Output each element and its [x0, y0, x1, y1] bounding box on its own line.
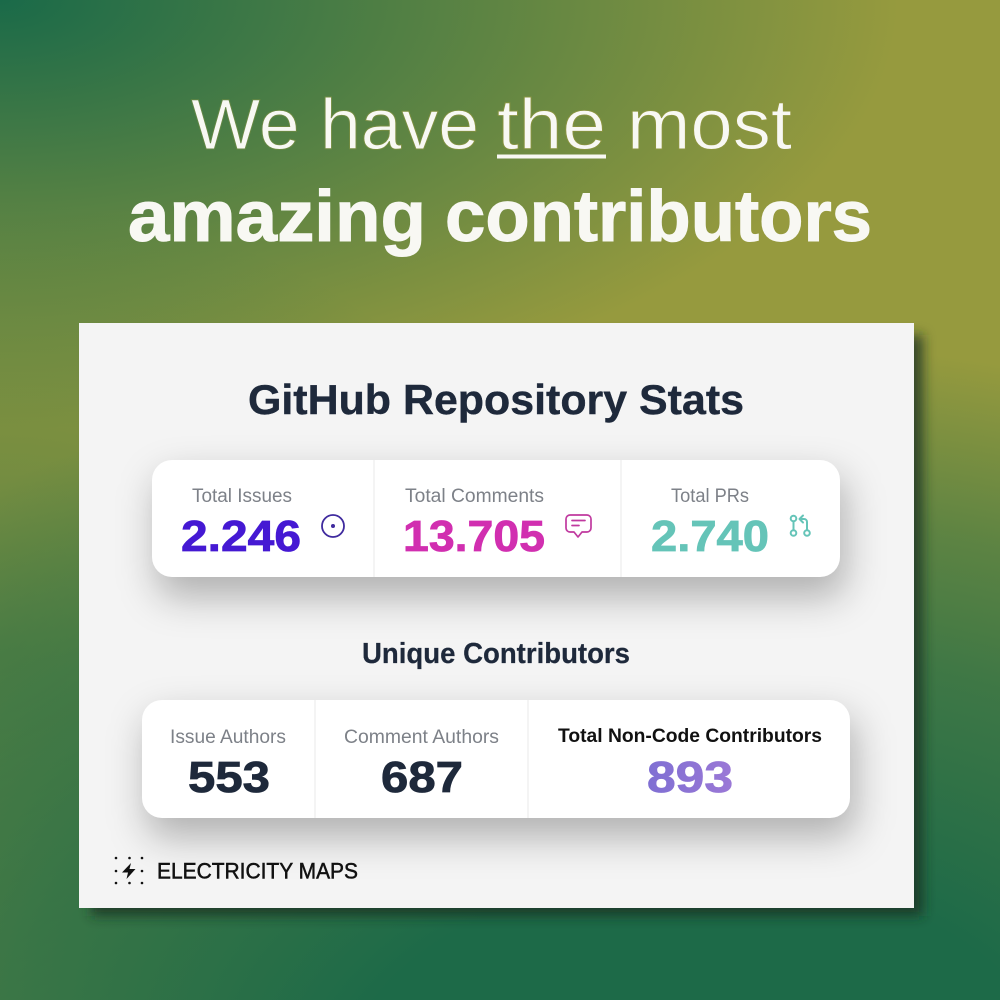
- title line 1: most: [627, 86, 792, 165]
- label: Comment Authors: [344, 727, 499, 748]
- wordmark: ELECTRICITY MAPS: [157, 858, 358, 884]
- card body: [152, 460, 840, 577]
- card dividers: [374, 460, 621, 577]
- value: 893: [647, 753, 733, 802]
- card shadow: [146, 716, 856, 838]
- title line 1: We have: [191, 86, 479, 165]
- icon: bolt in dotted square: [115, 857, 143, 884]
- value: 2.246: [181, 512, 301, 561]
- stat: total PRs: [651, 486, 810, 561]
- stat: issue authors: [170, 727, 286, 802]
- icon: pull request: [791, 516, 810, 536]
- underline: [497, 154, 606, 158]
- logo: Electricity Maps: [115, 857, 358, 884]
- card shadow: [156, 476, 846, 598]
- title line 1: the: [497, 86, 606, 165]
- label: Total PRs: [671, 486, 749, 507]
- subheading: Unique Contributors: [362, 638, 630, 670]
- icon: comment bubble: [566, 515, 591, 537]
- stat: total issues: [181, 486, 344, 561]
- icon: issue circle: [322, 515, 344, 537]
- title line 2: contributors: [445, 177, 872, 257]
- label: Total Issues: [192, 486, 292, 507]
- panel heading: GitHub Repository Stats: [248, 376, 744, 423]
- panel background: [79, 323, 914, 908]
- card dividers: [315, 700, 528, 818]
- panel shadow: [91, 335, 923, 916]
- label: Total Non-Code Contributors: [558, 726, 822, 747]
- card: totals: [152, 460, 846, 598]
- panel: GitHub stats: [79, 323, 923, 916]
- stat: total non-code contributors: [558, 726, 822, 802]
- stat: comment authors: [344, 727, 499, 802]
- card: unique contributors: [142, 700, 856, 838]
- title line 2: amazing: [128, 177, 426, 257]
- title: [128, 86, 872, 257]
- value: 553: [188, 753, 270, 802]
- stat: total comments: [403, 486, 591, 561]
- value: 687: [381, 753, 463, 802]
- label: Total Comments: [405, 486, 544, 507]
- card body: [142, 700, 850, 818]
- title line 1: [191, 86, 792, 165]
- title line 2: [128, 177, 872, 257]
- value: 13.705: [403, 512, 545, 561]
- label: Issue Authors: [170, 727, 286, 748]
- value: 2.740: [651, 512, 769, 561]
